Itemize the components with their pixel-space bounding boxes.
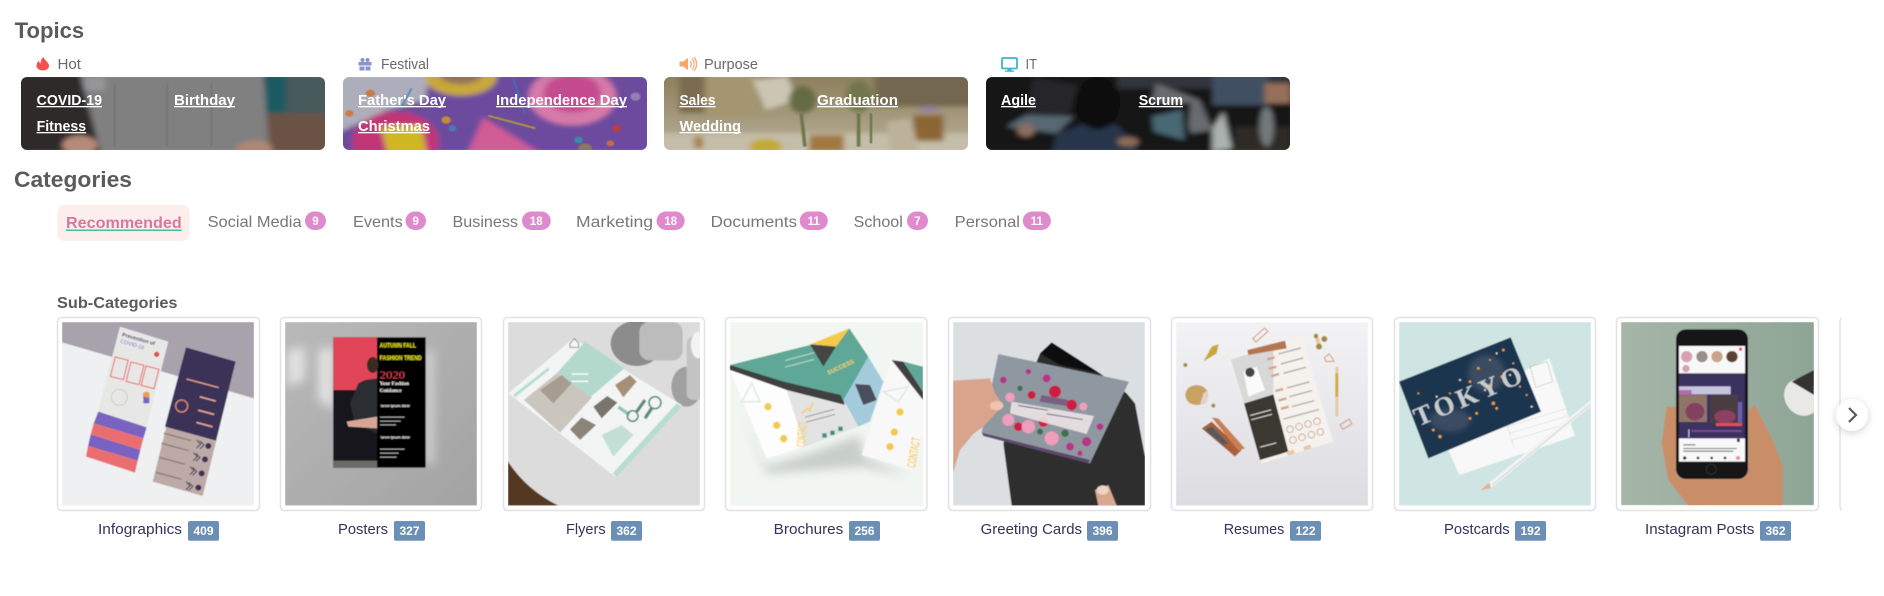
caption: Instagram Posts: 362 — [1765, 524, 1786, 538]
thumbnail: Posters — [285, 322, 477, 506]
caption: Postcards — [1444, 521, 1546, 541]
tab: Events — [353, 212, 426, 231]
caption: Brochures: Brochures — [774, 522, 843, 538]
tab: Events: Events — [353, 214, 403, 231]
heading: Topics: Topics — [15, 18, 84, 43]
link: Fitness: Fitness — [37, 118, 86, 135]
tab: Social Media: Social Media — [208, 214, 302, 231]
caption: Resumes: 122 — [1295, 524, 1316, 538]
thumbnail: Greeting Cards — [953, 322, 1145, 506]
thumbnail: Infographics: COVID-19 — [119, 339, 145, 351]
caption: Resumes: Resumes — [1224, 522, 1284, 538]
link: Father's Day: Father's Day — [358, 92, 447, 109]
caption: Flyers: Flyers — [566, 522, 606, 538]
thumbnail: Posters: Your Fashion — [380, 382, 409, 387]
caption: Posters: Posters — [338, 522, 388, 538]
heading: Categories: Categories — [14, 167, 132, 192]
thumbnail: Resumes — [1176, 322, 1368, 506]
icon: flame — [36, 57, 49, 70]
thumbnail: Posters: Guidance — [380, 389, 402, 394]
caption: Postcards: Postcards — [1444, 522, 1510, 538]
caption: Instagram Posts: Instagram Posts — [1645, 522, 1754, 538]
tab: Marketing: Marketing — [576, 214, 653, 231]
card: Posters — [280, 318, 482, 541]
thumbnail: Posters: AUTUMN FALL — [380, 342, 416, 349]
topic group: Hot — [21, 57, 325, 150]
tab: Recommended (active) — [58, 205, 190, 241]
label: Festival: Festival — [381, 57, 429, 73]
caption: Greeting Cards: Greeting Cards — [981, 522, 1082, 538]
tab: School: School — [854, 214, 903, 231]
topic group: IT — [978, 57, 1295, 153]
link: Graduation: Graduation — [817, 92, 898, 109]
tab: Documents: 11 — [808, 216, 820, 228]
tab: Social Media: 9 — [312, 216, 319, 228]
tab: Social Media — [208, 212, 326, 231]
tab: Business — [452, 212, 551, 231]
card: Resumes — [1172, 318, 1372, 541]
tab: Marketing: 18 — [664, 216, 678, 228]
thumbnail: Postcards: TOKYO — [1409, 360, 1527, 432]
thumbnail: Instagram Posts — [1621, 322, 1826, 506]
caption: Posters: 327 — [399, 524, 420, 538]
tab: Documents — [711, 212, 828, 231]
tab: Documents: Documents — [711, 214, 797, 231]
topic card: Festival — [343, 77, 647, 150]
caption: Flyers: 362 — [616, 524, 637, 538]
thumbnail: Postcards — [1399, 322, 1591, 506]
caption: Postcards: 192 — [1520, 524, 1541, 538]
caption: Brochures: 256 — [854, 524, 875, 538]
icon: gift — [358, 58, 372, 70]
tab: School — [854, 212, 928, 231]
topic card: Purpose — [664, 77, 968, 150]
thumbnail: Posters: lorem ipsum dolor — [381, 435, 410, 440]
thumbnail: Posters: FASHION TREND — [380, 355, 422, 362]
topic group: Festival — [343, 58, 647, 150]
caption: Infographics: Infographics — [98, 522, 182, 538]
link: Wedding: Wedding — [680, 118, 741, 135]
caption: Greeting Cards — [981, 521, 1118, 541]
card: Infographics — [58, 318, 260, 541]
card: Postcards — [1394, 318, 1596, 541]
link: Independence Day: Independence Day — [496, 92, 628, 109]
card: Brochures — [726, 318, 927, 541]
tab: Recommended (active): Recommended — [66, 215, 182, 232]
category tabs — [58, 205, 1051, 241]
link: Christmas: Christmas — [358, 118, 430, 135]
tab: Business: 18 — [530, 216, 543, 228]
topic card: IT — [986, 77, 1290, 150]
caption: Flyers — [566, 521, 642, 541]
thumbnail: Infographics: Prevention of — [121, 332, 156, 347]
card: Greeting Cards — [948, 318, 1150, 541]
thumbnail: Brochures: SUCCESS — [827, 359, 855, 377]
link: Sales: Sales — [680, 92, 716, 109]
card: Instagram Posts — [1616, 318, 1826, 541]
caption: Instagram Posts — [1645, 521, 1791, 541]
caption: Resumes — [1224, 521, 1321, 541]
link: Scrum: Scrum — [1139, 92, 1183, 109]
thumbnail: Infographics — [62, 322, 254, 506]
tab: Business: Business — [452, 214, 518, 231]
caption: Posters — [338, 521, 425, 541]
tab: Marketing — [576, 212, 685, 231]
tab: School: 7 — [914, 216, 921, 228]
heading: Sub-Categories: Sub-Categories — [57, 295, 178, 312]
thumbnail: Flyers — [508, 321, 706, 506]
thumbnail: Brochures: CONTACT — [904, 436, 924, 469]
thumbnail: Brochures: CONTACT — [794, 421, 810, 448]
tab: Personal — [955, 212, 1051, 231]
label: IT: IT — [1026, 57, 1037, 73]
thumbnail: Brochures — [730, 322, 924, 506]
tab: Personal: 11 — [1031, 216, 1043, 228]
thumbnail: Posters: 2020 — [380, 371, 405, 382]
button: next arrow — [1836, 399, 1868, 431]
topic group: Purpose — [657, 57, 974, 155]
caption: Infographics — [98, 521, 219, 541]
caption: Brochures — [774, 521, 880, 541]
label: Hot: Hot — [58, 57, 81, 73]
caption: Infographics: 409 — [193, 524, 214, 538]
caption: Greeting Cards: 396 — [1092, 524, 1113, 538]
icon: monitor — [1002, 58, 1017, 72]
icon: speaker — [680, 57, 697, 71]
label: Purpose: Purpose — [704, 57, 758, 73]
card: Flyers — [504, 318, 706, 541]
thumbnail: Posters: lorem ipsum dolor — [381, 403, 410, 408]
link: COVID-19: COVID-19 — [37, 92, 102, 109]
topic card: Hot — [21, 77, 325, 150]
tab: Personal: Personal — [955, 214, 1020, 231]
link: Birthday: Birthday — [174, 92, 236, 109]
link: Agile: Agile — [1001, 92, 1036, 109]
tab: Events: 9 — [412, 216, 419, 228]
card: next partially visible — [1839, 317, 1842, 511]
